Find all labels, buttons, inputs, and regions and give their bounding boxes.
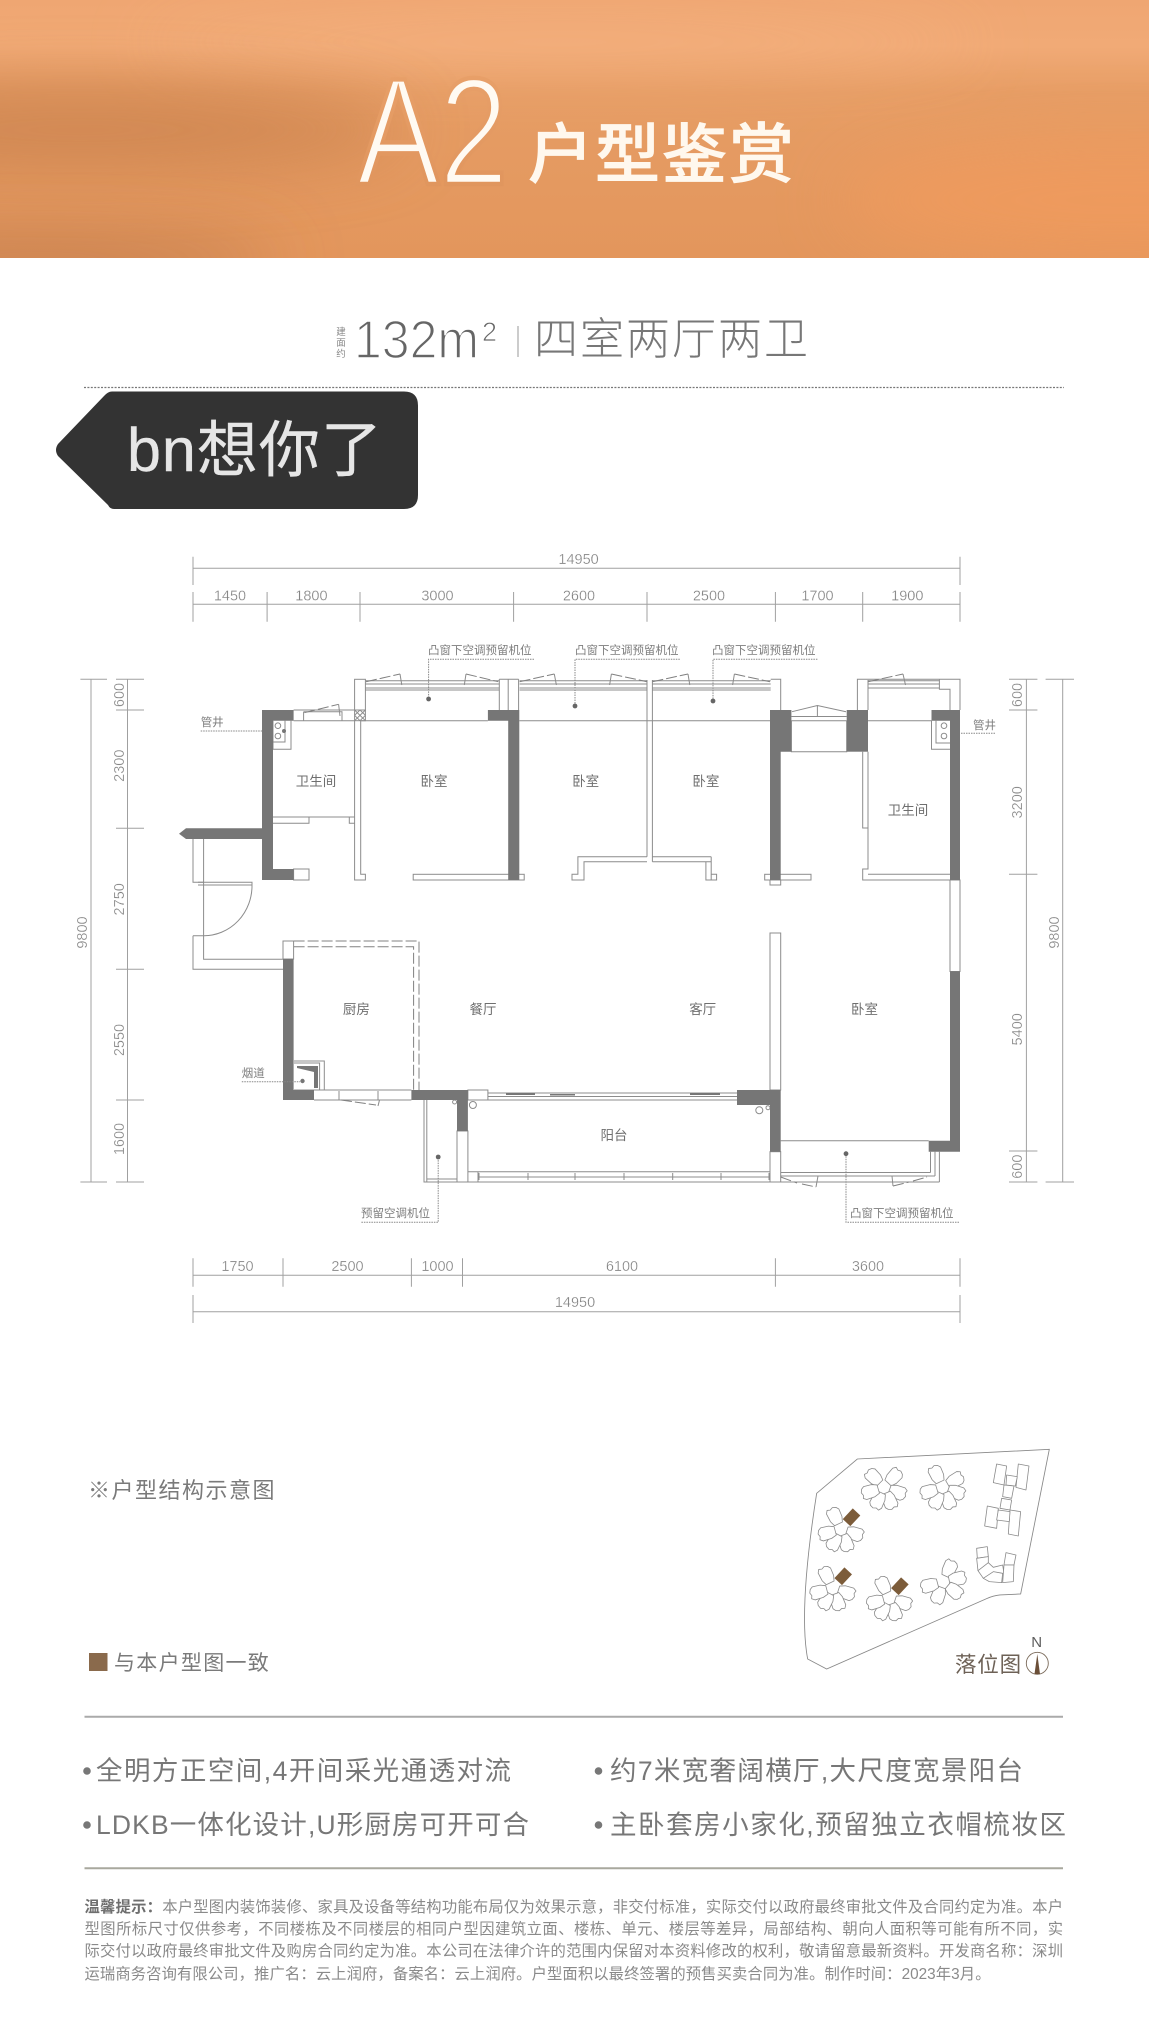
left dimensions: 600 [112, 683, 128, 707]
disclaimer text: 运瑞商务咨询有限公司，推广名：云上润府，备案名：云上润府。户型面积以最终签署的预售买卖合同为准。制作时间：2023年3月。 [84, 1966, 990, 1983]
title: 户型鉴赏 [528, 118, 796, 191]
left dimensions: 2550 [112, 1024, 128, 1056]
compass [1026, 1634, 1048, 1674]
top dimensions: 3000 [421, 588, 454, 604]
callouts: 凸窗下空调预留机位 [575, 643, 678, 657]
disclaimer text: 型图所标尺寸仅供参考，不同楼栋及不同楼层的相同户型因建筑立面、楼栋、单元、楼层等差异，局部结构、朝向人面积等可能有所不同，实 [84, 1921, 1063, 1938]
floor plan [179, 643, 996, 1222]
disclaimer text: 际交付以政府最终审批文件及购房合同约定为准。本公司在法律介许的范围内保留对本资料修改的权利，敬请留意最新资料。开发商名称：深圳 [84, 1943, 1063, 1960]
right dimensions: 5400 [1010, 1013, 1026, 1045]
feature bullets: 约7米宽奢阔横厅,大尺度宽景阳台 [610, 1756, 1023, 1786]
left dimensions: 9800 [75, 916, 91, 949]
subheading: area and layout: 2 [482, 317, 497, 347]
room labels [296, 773, 928, 1143]
subheading: area and layout: 四室两厅两卫 [534, 315, 810, 364]
subheading: area and layout: 132m [354, 310, 479, 370]
right dimensions: 600 [1010, 1155, 1026, 1179]
tag label: bn想你了 [127, 416, 383, 484]
site plan [805, 1449, 1049, 1669]
right dimensions: 9800 [1047, 916, 1063, 949]
building cluster [918, 1463, 967, 1511]
bottom dimensions: 2500 [331, 1259, 364, 1275]
schematic note: ※户型结构示意图 [88, 1478, 276, 1503]
bottom dimensions: 1750 [221, 1259, 254, 1275]
subheading: area and layout: 约 [336, 348, 346, 360]
top dimensions: 1800 [295, 588, 328, 604]
room labels: 卫生间 [296, 774, 336, 789]
top dimensions: 1450 [214, 588, 246, 604]
subheading: area and layout: 建 [336, 326, 346, 338]
building cluster with highlighted unit [808, 1564, 857, 1613]
solid dark walls [262, 710, 294, 880]
callouts: 管井 [973, 718, 996, 732]
H-shaped buildings [985, 1464, 1029, 1536]
right dimensions: 3200 [1010, 786, 1026, 818]
AC ledge [424, 1100, 457, 1182]
top dimensions: 2500 [693, 588, 725, 604]
right dimensions [1009, 679, 1074, 1182]
room labels: 客厅 [689, 1001, 716, 1017]
left dimensions [75, 679, 144, 1182]
outlined walls [179, 643, 996, 1222]
building cluster with highlighted unit [817, 1505, 865, 1554]
feature bullets: 全明方正空间,4开间采光通透对流 [96, 1756, 511, 1786]
room labels: 厨房 [343, 1002, 370, 1017]
tag label [56, 392, 418, 509]
building cluster with highlighted unit [865, 1574, 914, 1623]
top dimensions [193, 552, 960, 622]
subheading: area and layout: 面 [336, 338, 346, 349]
window bands [365, 681, 939, 690]
legend: 与本户型图一致 [114, 1652, 270, 1675]
callouts [201, 643, 996, 1222]
feature bullets [83, 1756, 1066, 1840]
room labels: 餐厅 [470, 1002, 496, 1017]
disclaimer text: 温馨提示：本户型图内装饰装修、家具及设备等结构功能布局仅为效果示意，非交付标准，实际交付以政府最终审批文件及合同约定为准。本户 [84, 1899, 1063, 1916]
room labels: 卧室 [692, 773, 719, 789]
building cluster [919, 1558, 968, 1606]
top dimensions: 1900 [891, 588, 923, 604]
top dimensions: 1700 [801, 588, 834, 604]
left dimensions: 2750 [112, 883, 128, 915]
window sashes [304, 674, 903, 713]
callouts: 凸窗下空调预留机位 [850, 1206, 954, 1220]
title [357, 47, 796, 217]
disclaimer text [84, 1898, 1063, 1983]
feature bullets: LDKB一体化设计,U形厨房可开可合 [96, 1810, 529, 1840]
callouts: 管井 [201, 715, 224, 729]
room labels: 卧室 [420, 773, 448, 789]
compass: N [1031, 1634, 1042, 1651]
room labels: 卧室 [851, 1001, 878, 1017]
room labels: 阳台 [600, 1128, 628, 1143]
callouts: 凸窗下空调预留机位 [428, 643, 532, 657]
U-shaped building [977, 1547, 1016, 1583]
bottom dimensions [193, 1258, 960, 1323]
feature bullets: 主卧套房小家化,预留独立衣帽梳妆区 [610, 1810, 1066, 1840]
room labels: 卧室 [572, 773, 599, 789]
top dimensions: 2600 [563, 588, 595, 604]
room labels: 卫生间 [888, 803, 928, 818]
left dimensions: 2300 [112, 750, 128, 782]
bottom dimensions: 14950 [555, 1295, 595, 1311]
bottom dimensions: 1000 [421, 1259, 454, 1275]
callouts: 烟道 [242, 1066, 265, 1080]
bottom dimensions: 3600 [852, 1259, 884, 1275]
left dimensions: 1600 [112, 1123, 128, 1155]
callouts: 凸窗下空调预留机位 [712, 643, 816, 657]
building cluster [860, 1466, 908, 1511]
right dimensions: 600 [1010, 683, 1026, 707]
title: A2 [357, 47, 508, 217]
bottom dimensions: 6100 [606, 1259, 638, 1275]
subheading: area and layout [336, 310, 810, 370]
kitchen dashed partition [294, 941, 419, 1090]
top dimensions: 14950 [558, 552, 599, 568]
site plan caption: 落位图 [955, 1653, 1022, 1677]
header band [0, 0, 1149, 280]
callouts: 预留空调机位 [361, 1206, 430, 1220]
